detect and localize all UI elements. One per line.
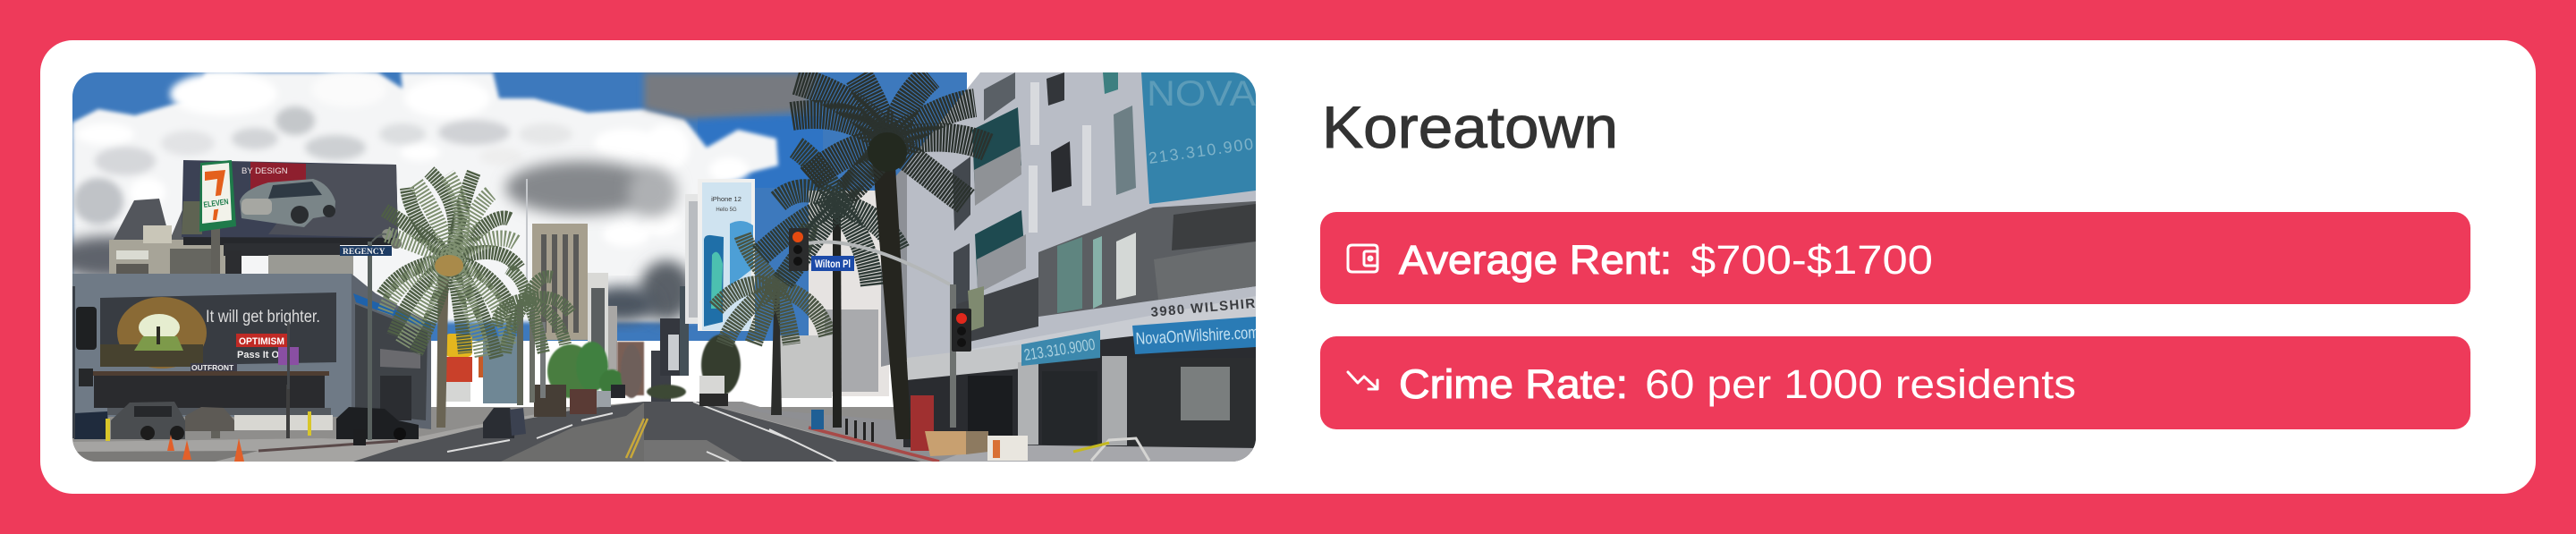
parked cars	[74, 376, 728, 440]
billboard headline: It will get brighter.	[206, 308, 320, 326]
phone number sign	[1021, 330, 1100, 366]
regency sign: REGENCY	[343, 248, 386, 257]
road and sidewalk	[72, 402, 1256, 462]
nova banner	[1141, 72, 1256, 204]
wilton street sign	[811, 256, 854, 271]
billboard text: BY DESIGN	[242, 166, 288, 176]
rent label: Average Rent:	[1399, 237, 1672, 283]
street trees	[547, 335, 741, 399]
white apartment building: 213.310.900	[1148, 135, 1254, 167]
upper windows and balconies	[972, 107, 1021, 195]
billboard support structure	[183, 236, 398, 275]
sky	[72, 72, 967, 341]
banner text: iPhone 12	[711, 195, 741, 203]
icon: wallet	[1348, 245, 1377, 272]
palm tree 2	[496, 268, 571, 405]
sidewalk in front of storefront	[939, 445, 1256, 462]
street lamps and poles	[286, 179, 528, 440]
address text: 3980 WILSHIR	[1150, 296, 1256, 320]
storefront: NovaOnWilshire.com	[1135, 324, 1259, 349]
tunnel image	[117, 297, 207, 369]
dark band with windows	[1038, 201, 1256, 317]
website sign	[1132, 317, 1256, 354]
wilton traffic signal: Wilton Pl	[815, 258, 851, 270]
billboard car	[240, 179, 335, 227]
crime value: 60 per 1000 residents	[1645, 361, 2076, 407]
white apartment building	[881, 72, 1256, 369]
white apartment building: NOVA	[1147, 74, 1256, 114]
optimism label	[236, 334, 287, 347]
crime rate pill	[1320, 336, 2470, 429]
gray corner building	[72, 274, 431, 429]
average rent pill	[1320, 212, 2470, 304]
clouds	[54, 72, 818, 322]
palm tree 1	[383, 172, 519, 428]
top billboard: car ad	[182, 160, 398, 238]
outfront label: OUTFRONT	[191, 363, 234, 372]
left traffic light	[72, 286, 97, 438]
castle building	[109, 199, 227, 275]
wilton traffic signal	[789, 228, 971, 428]
iPhone tower banner	[698, 179, 755, 331]
storefront	[903, 317, 1259, 462]
regency sign	[340, 246, 392, 257]
dark palm trees	[716, 76, 988, 439]
iPhone tower banner: Hello 5G	[716, 208, 737, 213]
banner phones	[704, 235, 724, 326]
canopy under billboard	[92, 363, 333, 430]
storefront: 213.310.9000	[1022, 335, 1097, 364]
lower billboard: optimism ad: OPTIMISM	[239, 336, 284, 347]
traffic cones and posts	[106, 411, 366, 462]
street furniture and planters	[811, 395, 1149, 461]
lower billboard: optimism ad	[100, 292, 336, 369]
icon: trending down	[1348, 372, 1377, 389]
neighborhood photo	[54, 72, 1259, 462]
title: Koreatown	[1322, 94, 1618, 160]
pass it on: Pass It On.	[237, 350, 288, 360]
7-Eleven pole	[211, 228, 220, 438]
sign wordmark: ELEVEN	[203, 197, 229, 209]
distant buildings	[532, 191, 889, 404]
crime label: Crime Rate:	[1399, 361, 1628, 407]
7-Eleven sign	[199, 160, 236, 232]
facade sill band	[957, 296, 1256, 352]
pollo loco sign	[445, 334, 519, 403]
rent value: $700-$1700	[1690, 237, 1933, 283]
